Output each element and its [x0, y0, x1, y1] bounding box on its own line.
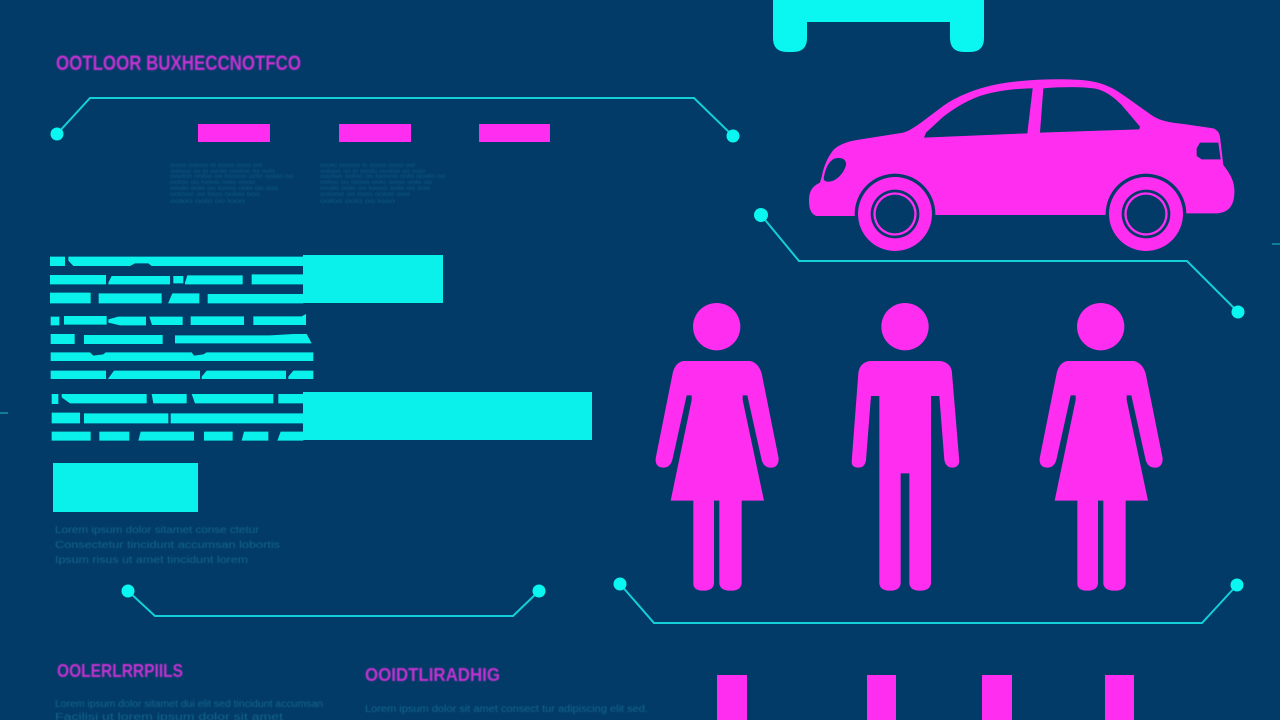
connector: under car [754, 208, 1244, 318]
text block: faint column one: ooloo oo loooo oolo oooo [170, 180, 256, 186]
icon: woman right [1040, 303, 1163, 591]
text block: faint column two [320, 163, 446, 205]
text block: lower middle copy: Lorem ipsum dolor sit amet consect tur adipiscing elit sed. [365, 704, 648, 715]
text block: faint column two: oolooo oo looo ooloo ooo [320, 192, 411, 198]
bar two [303, 392, 592, 440]
icon: woman left [656, 303, 779, 591]
text block: faint column two: ooolo oolo oo loooo oolo oo ooo [320, 186, 431, 192]
text block: faint column two: ooloo oo loooo oolo oooo oolo oo [320, 180, 433, 186]
text block: lower left section copy [55, 699, 323, 720]
bar chart: cyan bars and broken rows [50, 255, 592, 512]
text block: faint column two: oooloo ooloo oo looooo oolo ooolo oo [320, 174, 446, 180]
wheel: rear [1106, 174, 1186, 254]
text block: lower left faint copy [55, 525, 280, 566]
heading: lower middle: OOIDTLIRADHIG [365, 665, 500, 685]
connector: under people [614, 578, 1244, 623]
edge tick: left [0, 412, 8, 414]
text block: faint column one: ooolo oolo oo loooo oolo oo ooo [170, 186, 279, 192]
text block: faint column one: oooloo ooloo oo looooo oolo ooolo oo [170, 174, 294, 180]
text block: faint column two: ooolo oolooo lo ooloo oooo ool [320, 163, 415, 169]
text block: lower left faint copy: Consectetur tincidunt accumsan lobortis [55, 540, 280, 551]
bar two rows [52, 394, 340, 441]
text block: faint column one: oolooo oo looo ooloo ooo [170, 192, 261, 198]
text block: faint column one: oolooo oo lo ooolo oooloo oo oolo [170, 169, 276, 175]
text-like rows [51, 314, 313, 379]
text block: faint column one: ooloo oolo oo looo [170, 199, 246, 205]
icon: top cyan bracket [773, 0, 984, 52]
edge tick: right [1272, 243, 1280, 245]
icon: man [852, 303, 959, 591]
text block: lower left faint copy: Lorem ipsum dolor sitamet conse ctetur [55, 525, 260, 536]
stat block [53, 463, 198, 512]
title: OOTLOOR BUXHECCNOTFCO [56, 52, 301, 75]
text block: lower left faint copy: Ipsum risus ut amet tincidunt lorem [55, 555, 248, 566]
bar one [303, 255, 443, 303]
text block: lower left section copy: Lorem ipsum dolor sitamet dui elit sed tincidunt accumsan [55, 699, 323, 710]
text block: faint column one: ooolo oolooo lo ooloo oooo ool [170, 163, 262, 169]
magenta bottom bars [717, 675, 1134, 720]
heading: lower left: OOLERLRRPIILS [57, 661, 183, 681]
text block: faint column one [170, 163, 294, 205]
bar one rows [50, 257, 340, 303]
text block: faint column two: oolooo oo lo ooolo oooloo oo oolo [320, 169, 426, 175]
wheel: front [855, 174, 935, 254]
connector: top left panel frame [50, 98, 740, 142]
magenta header bars [198, 124, 550, 142]
text block: faint column two: ooloo oolo oo looo [320, 199, 396, 205]
icon: car [809, 79, 1234, 254]
connector: lower left frame [122, 584, 546, 616]
